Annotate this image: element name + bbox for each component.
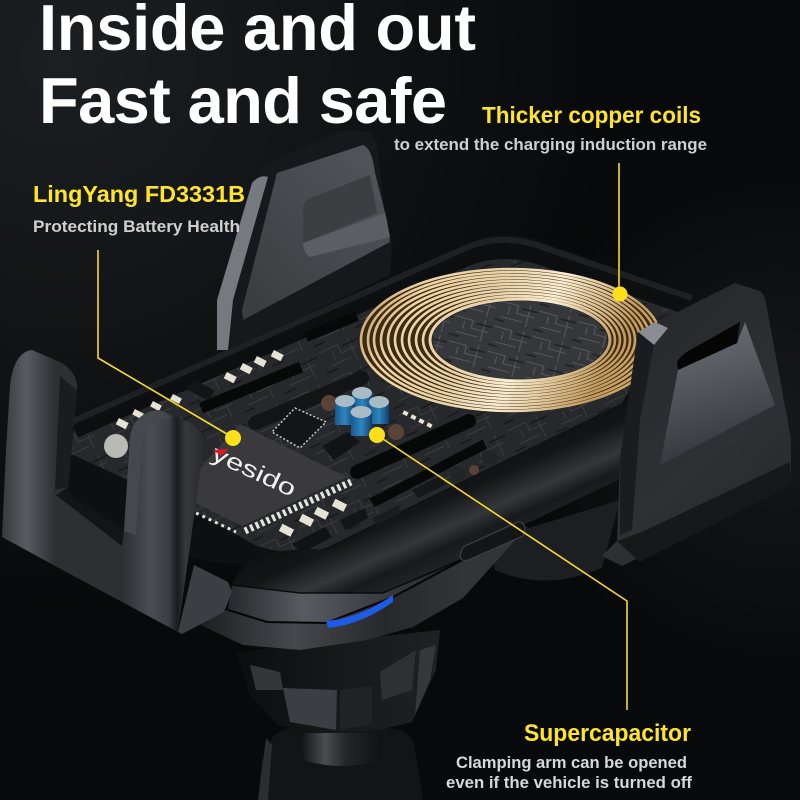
device body [190,403,640,650]
leader lines and dots [98,163,628,710]
callout: supercapacitor [446,720,693,792]
leader: chip [98,250,241,446]
callout: supercapacitor: Supercapacitor [524,720,691,747]
callout: supercapacitor: even if the vehicle is turned off [446,774,693,792]
rear mount dome [490,500,620,581]
callout: chip: LingYang FD3331B [33,181,245,207]
right clamp arm [602,283,791,566]
circuit board [71,250,682,552]
blue indicator light [326,595,393,628]
wireless charger tray [60,234,695,575]
coil centre circuitry [433,301,607,379]
title [39,0,476,137]
leader: capacitor [369,427,627,710]
arm window [660,322,775,465]
inner tray shadow [76,254,682,433]
left clamp arm [2,350,232,634]
callout: chip: Protecting Battery Health [33,217,240,236]
callout: chip [33,181,245,236]
back clamp arm [217,130,392,352]
body lip [228,522,530,623]
callout: copper coils [394,102,707,154]
title: Fast and safe [39,64,447,137]
surface-mount components [104,350,498,553]
callout: copper coils: Thicker copper coils [482,102,701,128]
chip logo: yesido [208,440,300,502]
main chip [194,424,351,532]
copper coil [361,269,661,411]
blue capacitors [321,387,404,440]
arm left edge highlight [217,176,268,350]
tray rim [69,240,692,423]
callout: copper coils: to extend the charging induction range [394,136,707,154]
callout: supercapacitor: Clamping arm can be opened [456,754,687,772]
arm inner bevel [56,487,124,546]
board slots [201,316,485,503]
side button [460,522,525,560]
leader: coil [612,163,628,302]
ball joint and stem [236,630,440,800]
